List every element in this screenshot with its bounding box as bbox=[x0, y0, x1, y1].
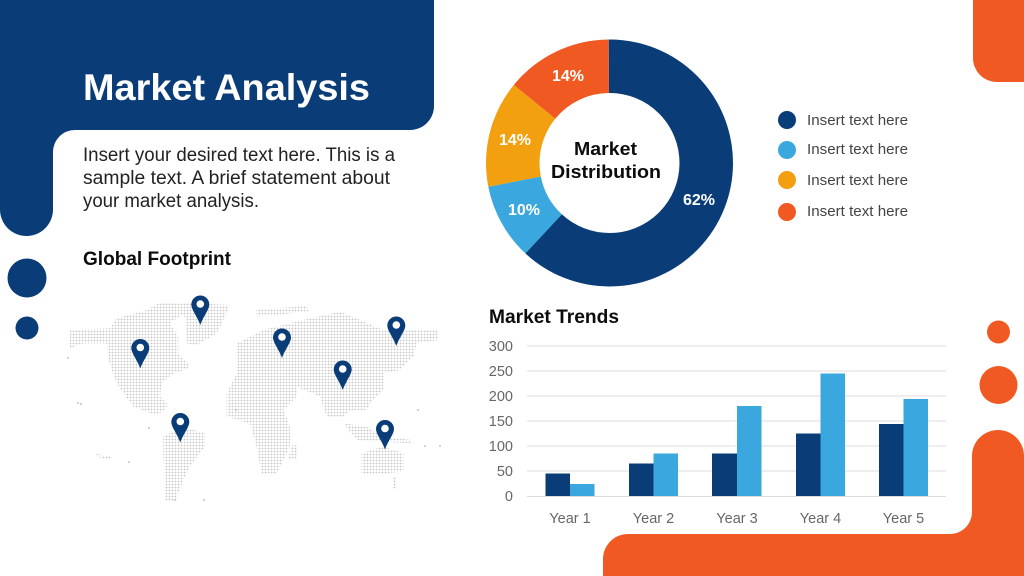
donut chart: market distribution bbox=[499, 66, 715, 260]
chart legend: Insert text here bbox=[807, 113, 908, 129]
pin: Central Asia bbox=[334, 360, 352, 390]
bar chart: market trends: 0 bbox=[505, 489, 513, 505]
heading: global footprint: Global Footprint bbox=[83, 249, 232, 270]
bar chart: market trends: 150 bbox=[489, 414, 513, 430]
pin: Europe bbox=[273, 328, 291, 358]
bar chart: market trends: Year 5 bbox=[883, 511, 924, 527]
donut chart: market distribution: 14% bbox=[552, 68, 584, 85]
bar chart: market trends bbox=[489, 339, 946, 527]
bar chart: market trends: 50 bbox=[497, 464, 513, 480]
dotted world map bbox=[67, 304, 441, 501]
bar chart: market trends: Year 4 bbox=[800, 511, 841, 527]
bar chart: market trends: 100 bbox=[489, 439, 513, 455]
chart legend: Insert text here bbox=[807, 204, 908, 220]
donut chart: market distribution: Market bbox=[574, 138, 637, 159]
orange decorative circles bbox=[980, 320, 1018, 404]
pin: north Atlantic bbox=[191, 296, 209, 325]
donut chart: market distribution: Distribution bbox=[551, 161, 661, 182]
chart legend: Insert text here bbox=[807, 173, 908, 189]
heading: market trends: Market Trends bbox=[489, 307, 619, 328]
donut chart: market distribution: 62% bbox=[683, 192, 715, 209]
pin: Australia bbox=[376, 420, 394, 450]
intro text block bbox=[83, 145, 395, 212]
intro text block: sample text. A brief statement about bbox=[83, 168, 391, 189]
pin: North America bbox=[131, 339, 149, 368]
bar chart: market trends: 250 bbox=[489, 364, 513, 380]
chart legend bbox=[778, 111, 908, 221]
top-right orange corner shape bbox=[973, 0, 1024, 82]
pin: South America bbox=[171, 413, 189, 442]
pin: East Asia bbox=[387, 316, 405, 346]
intro text block: Insert your desired text here. This is a bbox=[83, 145, 395, 166]
map pins bbox=[131, 296, 405, 450]
navy decorative circles bbox=[8, 258, 46, 340]
bar chart: market trends: 200 bbox=[489, 389, 513, 405]
bar chart: market trends: Year 1 bbox=[549, 511, 591, 527]
bar chart: market trends: Year 2 bbox=[633, 511, 674, 527]
donut chart: market distribution: 14% bbox=[499, 132, 531, 149]
top-left navy header shape bbox=[0, 0, 434, 236]
intro text block: your market analysis. bbox=[83, 191, 259, 212]
donut chart: market distribution: 10% bbox=[508, 202, 540, 219]
bar chart: market trends: 300 bbox=[489, 339, 513, 355]
title: Market Analysis bbox=[83, 67, 370, 108]
chart legend: Insert text here bbox=[807, 142, 908, 158]
bar chart: market trends: Year 3 bbox=[716, 511, 758, 527]
bottom-right orange shape bbox=[603, 430, 1024, 576]
